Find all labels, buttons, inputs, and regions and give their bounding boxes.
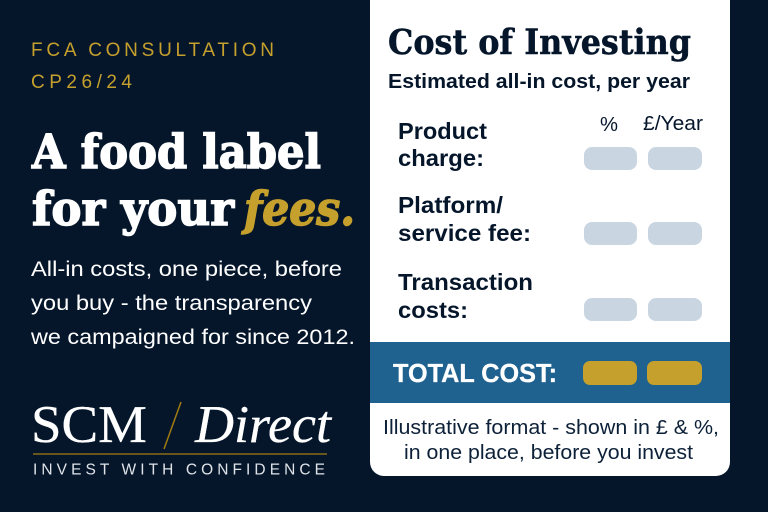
eyebrow: consultation reference: CP26/24 <box>31 72 132 93</box>
eyebrow: consultation reference <box>31 40 274 93</box>
intro paragraph: you buy - the transparency <box>31 291 312 315</box>
row: platform fee <box>398 192 702 246</box>
row: product charge: charge: <box>398 145 484 171</box>
row: transaction costs: costs: <box>398 297 468 323</box>
logo: SCM Direct: SCM <box>31 396 147 454</box>
total cost band: TOTAL COST: <box>393 360 557 388</box>
row: platform fee: Platform/ <box>398 192 503 218</box>
footnote: in one place, before you invest <box>404 441 693 464</box>
row: product charge: Product <box>398 118 487 144</box>
headline <box>31 125 355 237</box>
column headers: £/Year <box>643 113 703 135</box>
panel: cost of investing label <box>370 0 730 476</box>
row: platform fee: service fee: <box>398 220 531 246</box>
logo: SCM Direct: Direct <box>194 396 332 454</box>
row: transaction costs: Transaction <box>398 269 533 295</box>
headline: fees. <box>241 182 355 237</box>
row: product charge <box>398 118 702 171</box>
column headers: % <box>600 114 618 136</box>
intro paragraph: we campaigned for since 2012. <box>30 325 355 349</box>
column headers <box>600 113 703 136</box>
intro paragraph <box>30 257 355 349</box>
eyebrow: consultation reference: FCA CONSULTATION <box>31 40 274 61</box>
intro paragraph: All-in costs, one piece, before <box>31 257 342 281</box>
logo: SCM Direct: INVEST WITH CONFIDENCE <box>33 462 325 478</box>
headline: A food label <box>31 125 321 180</box>
footnote: Illustrative format - shown in £ & %, <box>383 416 719 439</box>
logo: SCM Direct <box>31 396 332 478</box>
row: transaction costs <box>398 269 702 323</box>
panel title: Cost of Investing <box>388 22 691 63</box>
total cost band <box>370 342 730 403</box>
footnote <box>383 416 719 464</box>
panel subtitle: Estimated all-in cost, per year <box>388 70 690 93</box>
headline: for your <box>32 182 235 237</box>
